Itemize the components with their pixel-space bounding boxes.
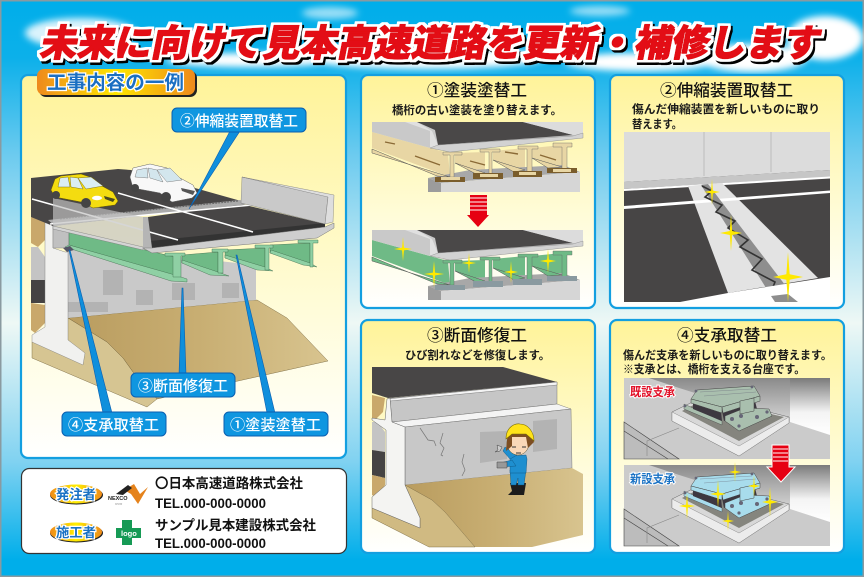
bridge illustration bbox=[31, 164, 334, 407]
heading: ①塗装塗替工 bbox=[427, 81, 527, 100]
illustration: abutment bbox=[372, 367, 583, 547]
callout: bearing replacement bbox=[62, 250, 166, 436]
ground bbox=[405, 468, 583, 547]
illustration: existing bearing bbox=[624, 378, 830, 459]
pier bbox=[372, 398, 420, 528]
description: 橋桁の古い塗装を塗り替えます。 bbox=[392, 103, 562, 117]
panel 2: expansion joint: 替えます。 bbox=[632, 117, 682, 131]
worker bbox=[495, 424, 534, 495]
ground embankment bbox=[68, 300, 328, 399]
illustration: new bearing: 新設支承 bbox=[630, 471, 675, 486]
callout: expansion joint: ②伸縮装置取替工 bbox=[180, 112, 298, 130]
arrow bbox=[767, 445, 795, 482]
sparkles bbox=[704, 179, 720, 205]
sparkles bbox=[394, 237, 412, 261]
description: 傷んだ支承を新しいものに取り替えます。 bbox=[623, 348, 832, 362]
heading badge: 工事内容の一例 bbox=[47, 72, 184, 94]
car: yellow bbox=[51, 174, 118, 208]
car: white bbox=[130, 164, 197, 202]
abutment wall bbox=[68, 245, 256, 318]
bearing detail bbox=[63, 246, 74, 252]
end block bbox=[53, 226, 69, 248]
illustration: existing bearing: 既設支承 bbox=[630, 384, 675, 399]
description: 傷んだ伸縮装置を新しいものに取り bbox=[632, 102, 820, 116]
illustration: joint bbox=[624, 132, 830, 302]
logo: nexco: ○○○ bbox=[115, 501, 123, 506]
deck slab bbox=[143, 223, 334, 253]
callout: section repair bbox=[131, 288, 235, 397]
girders bbox=[65, 232, 318, 282]
heading: ④支承取替工 bbox=[677, 326, 777, 345]
clouds bbox=[25, 6, 863, 72]
callout: expansion joint bbox=[172, 108, 306, 209]
contractor text: client: 〇日本高速道路株式会社 bbox=[155, 475, 303, 491]
panel: work overview bbox=[21, 75, 346, 458]
translucent deck section bbox=[53, 198, 143, 247]
logo: nexco bbox=[108, 484, 148, 506]
callout: bearing replacement: ④支承取替工 bbox=[68, 416, 159, 434]
contractor text: builder: TEL.000-000-0000 bbox=[155, 536, 266, 551]
callout: repainting bbox=[224, 255, 328, 436]
illustration: new bearing bbox=[624, 462, 830, 546]
description: ひび割れなどを修復します。 bbox=[405, 348, 550, 362]
badge: builder bbox=[50, 522, 103, 542]
heading badge bbox=[37, 69, 197, 97]
logo: nexco: NEXCO bbox=[108, 496, 128, 502]
contractor text: client: TEL.000-000-0000 bbox=[155, 496, 266, 511]
sparkles bbox=[729, 462, 741, 482]
panel 4: bearing replacement: ※支承とは、橋桁を支える台座です。 bbox=[623, 362, 805, 376]
left backdrop bbox=[31, 217, 45, 247]
illustration: old paint bbox=[372, 122, 583, 192]
logo: green cross bbox=[116, 520, 141, 545]
callout: section repair: ③断面修復工 bbox=[138, 378, 228, 395]
callout: repainting: ①塗装塗替工 bbox=[230, 416, 321, 434]
illustration: new paint bbox=[372, 230, 583, 300]
side barrier bbox=[241, 177, 328, 224]
panel 4: bearing replacement bbox=[610, 320, 844, 553]
panel 3: section repair bbox=[361, 320, 595, 553]
badge: client bbox=[50, 484, 103, 504]
contractor text: client bbox=[155, 475, 303, 511]
panel 2: expansion joint bbox=[610, 75, 844, 308]
panel: contractors bbox=[22, 468, 346, 554]
expansion joint bbox=[48, 200, 251, 226]
heading: ③断面修復工 bbox=[427, 326, 527, 345]
pier bbox=[32, 220, 85, 365]
heading: ②伸縮装置取替工 bbox=[660, 81, 793, 100]
road surface bbox=[31, 169, 241, 226]
title: 未来に向けて見本高速道路を更新・補修します bbox=[37, 22, 826, 64]
badge: client: 発注者 bbox=[56, 487, 96, 502]
badge: builder: 施工者 bbox=[56, 525, 96, 540]
contractor text: builder: サンプル見本建設株式会社 bbox=[155, 517, 316, 533]
arrow bbox=[467, 195, 489, 227]
contractor text: builder bbox=[155, 517, 316, 551]
panel 1: repainting bbox=[361, 75, 595, 308]
logo: green cross: logo bbox=[121, 529, 137, 538]
lane markings bbox=[32, 193, 253, 240]
